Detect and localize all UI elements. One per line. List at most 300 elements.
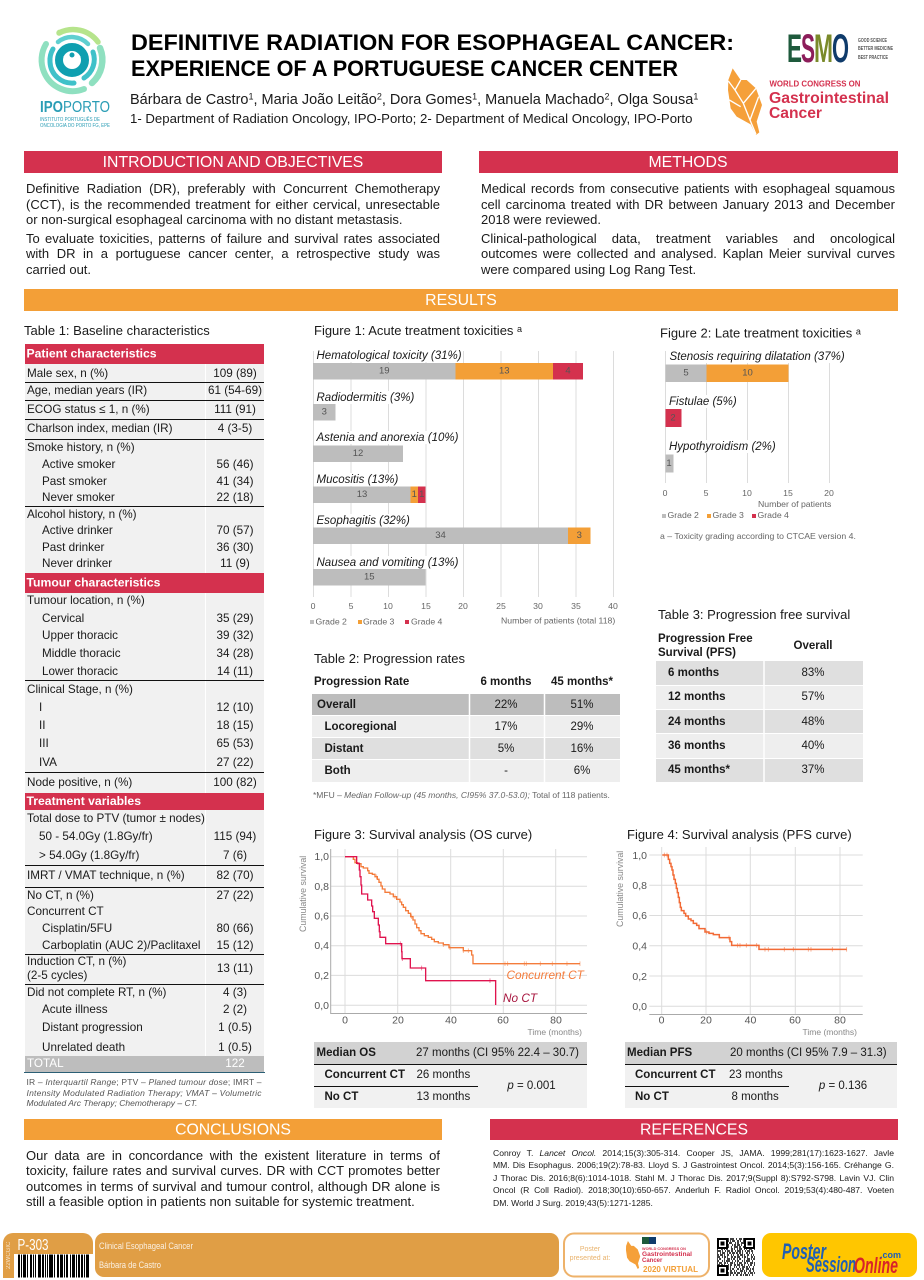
figure 1 title: a <box>517 324 522 334</box>
table 3: progression free survival: Overall <box>794 640 832 652</box>
footer: PosterSessionOnline logo: .com <box>880 1250 901 1260</box>
figure 3: OS Kaplan-Meier chart: 0 <box>342 1014 348 1026</box>
logo: Gastrointestinal Cancer: Gastrointestinal <box>769 90 889 107</box>
bar: hypothyroidism <box>666 440 777 472</box>
table 1: baseline characteristics: Total dose to PTV (tumor ± nodes) <box>27 812 205 825</box>
table 1: baseline characteristics: Age, median years (IR) <box>27 384 147 397</box>
bar: astenia and anorexia <box>313 431 459 462</box>
figure 4: PFS Kaplan-Meier chart: 80 <box>834 1014 846 1026</box>
logo: ESMO: BEST PRACTICE <box>858 55 888 61</box>
title <box>131 30 734 81</box>
heading: conclusions <box>24 1119 442 1140</box>
table 2: progression rates: 6 months <box>480 676 532 688</box>
table 2: progression rates: 5% <box>498 743 514 755</box>
footer: PosterSessionOnline logo: Session <box>806 1252 856 1277</box>
table 3: progression free survival: 36 months <box>668 740 726 752</box>
authors: , Maria João Leitão <box>254 92 377 108</box>
legend: Grade 2 <box>668 510 699 520</box>
authors: 1 <box>693 92 698 102</box>
axis labels: 15 <box>783 488 793 498</box>
legend: Grade 3 <box>363 616 395 626</box>
table 2: progression rates: Overall <box>317 699 356 711</box>
bar: radiodermitis <box>313 391 416 420</box>
table 2: progression rates: Progression Rate <box>314 676 409 688</box>
table: median PFS: 23 months <box>729 1069 783 1081</box>
axis labels: 25 <box>496 601 506 611</box>
table 3: progression free survival: 37% <box>801 764 825 776</box>
figure 3: OS Kaplan-Meier chart: 40 <box>445 1014 457 1026</box>
text: introduction paragraph: Definitive Radiation (DR), preferably with Concurrent Chemotherapy <box>26 181 440 196</box>
table 1: baseline characteristics: III <box>39 737 49 750</box>
text: references list: Conroy T. Lancet Oncol. 2014;15(3):305-314. Cooper JS, JAMA. 1999;281(17):1623-1627. Javle <box>493 1148 894 1158</box>
table 3: progression free survival: 6 months <box>668 667 719 679</box>
table 2: progression rates: Both <box>324 765 351 777</box>
table 1: baseline characteristics: 111 (91) <box>214 403 256 416</box>
figure 2 title: Figure 2: Late treatment toxicities <box>660 326 852 340</box>
table 1: baseline characteristics: 4 (3) <box>223 986 247 999</box>
table 1 footnote: IR – Interquartil Range; PTV – Planed tumour dose; IMRT – <box>26 1077 262 1087</box>
figure 4: PFS Kaplan-Meier chart: Time (months) <box>803 1027 857 1037</box>
curve: concurrent CT <box>345 857 580 966</box>
footer: session and presenter bar: Bárbara de Castro <box>99 1260 161 1271</box>
table 1: baseline characteristics: 109 (89) <box>213 367 257 380</box>
table 1: baseline characteristics: 41 (34) <box>216 475 254 488</box>
table 2 footnote: *MFU – Median Follow-up (45 months, CI95% 37.0-53.0); Total of 118 patients. <box>313 790 610 800</box>
table 1: baseline characteristics: No CT, n (%) <box>27 889 94 902</box>
curve: no CT <box>345 857 496 1005</box>
table 1: baseline characteristics: 1 (0.5) <box>218 1041 252 1054</box>
figure 3: OS Kaplan-Meier chart: 0,0 <box>314 1000 329 1012</box>
logo: IPO Porto: INSTITUTO PORTUGUÊS DE <box>40 115 100 123</box>
table 2: progression rates: - <box>504 765 508 777</box>
table: median PFS: 8 months <box>732 1091 779 1103</box>
axis labels <box>311 601 618 611</box>
table 1: baseline characteristics: 2 (2) <box>223 1003 247 1016</box>
figure 3: OS Kaplan-Meier chart: 0,2 <box>314 970 329 982</box>
bar: stenosis: Stenosis requiring dilatation (37%) <box>670 351 845 363</box>
table: median OS: Median OS <box>316 1047 376 1059</box>
figure 4: PFS Kaplan-Meier chart: 0,2 <box>632 971 647 983</box>
authors: , Dora Gomes <box>382 92 472 108</box>
heading: methods <box>479 151 898 173</box>
figure 4: PFS Kaplan-Meier chart: 0,6 <box>632 910 647 922</box>
table 1: baseline characteristics: 65 (53) <box>216 737 254 750</box>
axis labels: 35 <box>571 601 581 611</box>
table 1: baseline characteristics: Alcohol history, n (%) <box>27 508 137 521</box>
figure 3: OS Kaplan-Meier chart: 0,4 <box>314 940 329 952</box>
label: no CT: No CT <box>503 991 538 1005</box>
text: introduction paragraph <box>26 181 440 276</box>
figure 3: OS Kaplan-Meier chart <box>298 849 587 1037</box>
authors: 2 <box>604 92 609 102</box>
bar: stenosis: 10 <box>742 368 753 378</box>
figure 4: PFS Kaplan-Meier chart <box>615 847 863 1037</box>
table 1: baseline characteristics: Treatment variables <box>26 794 141 808</box>
table 1: baseline characteristics: 1 (0.5) <box>218 1021 252 1034</box>
text: references list: Oncol (R Coll Radiol). 2018;30(10):650-657. Anderluh F. Radiol Oncol. 2019;53(4):480-487. Voeten <box>493 1185 894 1195</box>
table 3: progression free survival: 83% <box>801 667 825 679</box>
bar: hematological toxicity: 19 <box>379 366 390 376</box>
table 1: baseline characteristics: ECOG status ≤ 1, n (%) <box>27 403 150 416</box>
bar: hypothyroidism: 1 <box>666 458 672 469</box>
text: references list: DM. World J Surg. 2019;43(5):1271-1285. <box>493 1198 653 1208</box>
logo: ESMO: M <box>814 27 833 71</box>
figure 3: OS Kaplan-Meier chart: 0,8 <box>314 881 329 893</box>
table: median PFS: Concurrent CT <box>635 1069 716 1081</box>
authors: 2 <box>377 92 382 102</box>
figure 4: PFS Kaplan-Meier chart: 0,0 <box>632 1001 647 1013</box>
table 1: baseline characteristics: 100 (82) <box>213 776 257 789</box>
bar: radiodermitis: Radiodermitis (3%) <box>316 392 414 404</box>
figure 4: PFS Kaplan-Meier chart: 0,4 <box>632 940 647 952</box>
table 3: progression free survival: Progression Free <box>658 633 753 645</box>
table 1: baseline characteristics: Past drinker <box>42 541 104 554</box>
table 2: progression rates: 16% <box>570 743 594 755</box>
figure 4: PFS Kaplan-Meier chart: 60 <box>789 1014 801 1026</box>
table 1: baseline characteristics: 82 (70) <box>216 869 254 882</box>
text: conclusions paragraph <box>26 1148 440 1209</box>
axis labels <box>663 488 834 498</box>
figure 2 footnote: a – Toxicity grading according to CTCAE version 4. <box>660 531 856 541</box>
table 2: progression rates: Distant <box>324 743 364 755</box>
text: conclusions paragraph: Our data are in concordance with the existent literature in terms of <box>26 1148 440 1162</box>
table 3: progression free survival <box>656 633 863 782</box>
bar: fistulae: Fistulae (5%) <box>669 396 737 408</box>
table 3: progression free survival: 24 months <box>668 716 726 728</box>
table 1: baseline characteristics: Active smoker <box>42 458 115 471</box>
heading: introduction and objectives: INTRODUCTION AND OBJECTIVES <box>103 154 363 171</box>
text: introduction paragraph: or non-surgical esophageal carcinoma with no distant metastasis. <box>26 212 402 227</box>
logo: Gastrointestinal Cancer <box>728 68 889 135</box>
axis title: Number of patients (total 118) <box>501 616 615 626</box>
text: references list <box>493 1148 894 1208</box>
axis labels: 15 <box>421 601 431 611</box>
table 1: baseline characteristics: 35 (29) <box>216 612 254 625</box>
heading: results: RESULTS <box>425 292 497 309</box>
text: methods paragraph: 2018 were reviewed. <box>481 212 601 227</box>
heading: references <box>490 1119 898 1140</box>
table 2: progression rates <box>312 676 620 782</box>
table 2: progression rates: 6% <box>574 765 590 777</box>
table 1: baseline characteristics: I <box>39 701 42 714</box>
footer: PosterSessionOnline logo: Poster <box>782 1239 827 1264</box>
table 1: baseline characteristics: 27 (22) <box>216 889 254 902</box>
bar: hematological toxicity: 4 <box>565 366 571 376</box>
logo: Gastrointestinal Cancer: WORLD CONGRESS ON <box>770 78 860 88</box>
axis title: Number of patients <box>758 499 832 509</box>
logo: ESMO: O <box>832 27 849 71</box>
authors: , Olga Sousa <box>609 92 694 108</box>
legend: Grade 3 <box>712 510 744 520</box>
text: methods paragraph: Medical records from consecutive patients with esophageal squamous <box>481 181 895 196</box>
table 1: baseline characteristics: 22 (18) <box>216 491 254 504</box>
figure 3: OS Kaplan-Meier chart: 0,6 <box>314 910 329 922</box>
figure 4: PFS Kaplan-Meier chart: 0,8 <box>632 880 647 892</box>
axis labels: 5 <box>704 488 709 498</box>
bar: radiodermitis: 3 <box>322 406 327 418</box>
table 1: baseline characteristics: Distant progression <box>42 1021 143 1034</box>
figure 3: OS Kaplan-Meier chart: Cumulative survival <box>298 856 308 932</box>
table: median PFS: p = 0.136 <box>818 1080 867 1092</box>
table 1: baseline characteristics: Unrelated death <box>42 1041 125 1054</box>
table 1 footnote <box>26 1077 262 1108</box>
table 1: baseline characteristics: Node positive, n (%) <box>27 776 132 789</box>
table 3: progression free survival: 40% <box>801 740 825 752</box>
figure 3: OS Kaplan-Meier chart: 80 <box>550 1014 562 1026</box>
text: methods paragraph: Clinical-pathological data, treatment variables and oncological <box>481 230 895 246</box>
heading: methods: METHODS <box>648 154 728 171</box>
table 1: baseline characteristics: Acute illness <box>42 1003 108 1016</box>
table 1: baseline characteristics: 61 (54-69) <box>208 384 262 397</box>
bar: nausea and vomiting <box>313 556 459 586</box>
table 3: progression free survival: 48% <box>801 716 825 728</box>
table 1: baseline characteristics: 36 (30) <box>216 541 254 554</box>
table 3: progression free survival: Survival (PFS) <box>658 647 736 659</box>
heading: introduction and objectives <box>24 151 442 173</box>
table: median OS: 13 months <box>416 1091 470 1103</box>
bar: esophagitis <box>313 514 590 544</box>
axis labels: 40 <box>608 601 618 611</box>
figure 3: OS Kaplan-Meier chart: 60 <box>497 1014 509 1026</box>
bar: mucositis <box>313 473 426 503</box>
table: median OS: Concurrent CT <box>324 1069 405 1081</box>
table 1: baseline characteristics: 14 (11) <box>217 665 253 678</box>
text: methods paragraph: were compared using Log Rang Test. <box>481 262 696 276</box>
bar: esophagitis: 3 <box>577 530 582 541</box>
title: EXPERIENCE OF A PORTUGUESE CANCER CENTER <box>131 56 678 81</box>
bar: esophagitis: 34 <box>435 530 446 541</box>
table 1: baseline characteristics: 115 (94) <box>214 830 256 843</box>
table 1: baseline characteristics: Never smoker <box>42 491 115 504</box>
figure 4: PFS Kaplan-Meier chart: 40 <box>745 1014 756 1026</box>
logo: ESMO: GOOD SCIENCE <box>858 38 887 44</box>
table 1: baseline characteristics: Did not complete RT, n (%) <box>27 986 167 999</box>
table 1: baseline characteristics: (2-5 cycles) <box>27 969 88 982</box>
axis labels: 5 <box>349 601 354 611</box>
table 1: baseline characteristics: Active drinker <box>42 524 113 537</box>
logo: IPO Porto: ONCOLOGIA DO PORTO FG, EPE <box>40 123 110 129</box>
figure 3: OS Kaplan-Meier chart: Time (months) <box>528 1027 582 1037</box>
table 1: baseline characteristics <box>24 344 265 1072</box>
bar: astenia and anorexia: 12 <box>353 448 363 459</box>
logo: ESMO: BETTER MEDICINE <box>858 46 894 52</box>
table 1: baseline characteristics: 70 (57) <box>216 524 254 537</box>
bar: nausea and vomiting: 15 <box>364 572 375 582</box>
bar: fistulae <box>666 395 737 427</box>
table 1: baseline characteristics: Never drinker <box>42 557 112 570</box>
table: median OS: 27 months (CI 95% 22.4 – 30.7) <box>416 1047 579 1059</box>
table 1: baseline characteristics: Concurrent CT <box>27 905 104 918</box>
text: introduction paragraph: with DR in a portuguese cancer center, a retrospective study was <box>26 246 440 261</box>
table 2: progression rates: Locoregional <box>324 721 397 733</box>
footer: poster id and barcode <box>3 1233 93 1280</box>
logo: ESMO: S <box>801 27 815 71</box>
heading: results <box>24 289 898 311</box>
table 1: baseline characteristics: 122 <box>225 1057 245 1070</box>
table 1: baseline characteristics: 34 (28) <box>216 647 254 660</box>
curve: PFS <box>662 853 847 952</box>
logo: ESMO <box>787 27 894 71</box>
label: concurrent CT: Concurrent CT <box>506 968 585 982</box>
table 3: progression free survival: 12 months <box>668 691 726 703</box>
footer: poster presented at badge: 2020 VIRTUAL <box>643 1264 698 1274</box>
authors: , Manuela Machado <box>477 92 604 108</box>
table 1: baseline characteristics: 80 (66) <box>216 922 254 935</box>
text: introduction paragraph: To evaluate toxicities, patterns of failure and survival rates associated <box>26 230 440 246</box>
table 1 footnote: Modulated Arc Therapy; Chemotherapy – CT. <box>26 1098 197 1108</box>
footer: PosterSessionOnline logo: Online <box>854 1253 898 1278</box>
table 1: baseline characteristics: Tumour location, n (%) <box>27 594 145 607</box>
table 2: progression rates: 51% <box>570 699 594 711</box>
footer: session and presenter bar <box>95 1233 559 1277</box>
bar: mucositis: 1 <box>419 489 424 500</box>
figure 4: PFS Kaplan-Meier chart: 20 <box>700 1014 712 1026</box>
footer: QR code <box>717 1238 755 1276</box>
text: references list: J Thorac Dis. 2016;8(6):1014-1018. Stahl M. J Thorac Dis. 2017;9(Suppl 8):S792-S798. Lavin VJ. Clin <box>493 1173 894 1183</box>
legend: Grade 2 <box>316 616 347 626</box>
affiliations: 1- Department of Radiation Oncology, IPO-Porto; 2- Department of Medical Oncology, IPO-Porto <box>130 111 692 126</box>
table 3: progression free survival: 45 months* <box>668 764 731 776</box>
table 2: progression rates: 45 months* <box>551 676 614 688</box>
axis labels: 0 <box>311 601 316 611</box>
table 3 title: Table 3: Progression free survival <box>658 607 850 622</box>
table 1: baseline characteristics: II <box>39 719 46 732</box>
text: conclusions paragraph: outcomes in terms of survival and tumour control, although DR alone is <box>26 1178 440 1194</box>
footer: poster id and barcode: 22WCGIC <box>6 1241 12 1269</box>
logo: IPO Porto: IPOPORTO <box>40 99 110 116</box>
table 1 title: Table 1: Baseline characteristics <box>24 323 210 338</box>
text: conclusions paragraph: toxicity, failure rates and survival curves. DR with CCT promotes better <box>26 1163 440 1178</box>
bar: hematological toxicity: Hematological toxicity (31%) <box>316 350 462 362</box>
text: introduction paragraph: (CCT), is the recommended treatment for either cervical, unresectable <box>26 196 440 212</box>
footer: PosterSessionOnline logo <box>762 1233 917 1278</box>
table 1: baseline characteristics: Charlson index, median (IR) <box>27 422 173 435</box>
table: median OS: p = 0.001 <box>506 1080 556 1092</box>
heading: conclusions: CONCLUSIONS <box>175 1122 291 1138</box>
table 1: baseline characteristics: Cervical <box>42 612 84 625</box>
table 2: progression rates: 22% <box>494 699 518 711</box>
table 1: baseline characteristics: Patient characteristics <box>26 346 157 360</box>
footer: session and presenter bar: Clinical Esophageal Cancer <box>99 1241 193 1252</box>
table 1: baseline characteristics: Upper thoracic <box>42 629 118 642</box>
table 1: baseline characteristics: Tumour characteristics <box>26 576 161 590</box>
table 1: baseline characteristics: 12 (10) <box>216 701 254 714</box>
figure 1 title: Figure 1: Acute treatment toxicities <box>314 323 513 338</box>
logo: ESMO: E <box>787 27 802 71</box>
table: median OS: 26 months <box>416 1069 470 1081</box>
bar: hypothyroidism: Hypothyroidism (2%) <box>669 441 776 453</box>
logo: Gastrointestinal Cancer: Cancer <box>769 105 822 122</box>
figure 3: OS Kaplan-Meier chart: 1,0 <box>314 851 329 863</box>
text: conclusions paragraph: still a feasible option in patients non suitable for systemic treatment. <box>26 1194 415 1209</box>
logo: IPO Porto <box>40 30 110 129</box>
legend <box>310 616 443 626</box>
authors: 1 <box>248 92 254 102</box>
table 1: baseline characteristics: Induction CT, n (%) <box>27 955 126 968</box>
authors: Bárbara de Castro <box>130 92 248 108</box>
table 2: progression rates: 29% <box>570 721 594 733</box>
table: median PFS: No CT <box>635 1091 669 1103</box>
figure 1: acute toxicities bar chart <box>310 349 618 626</box>
footer: poster presented at badge: WORLD CONGRESS ON <box>642 1247 686 1251</box>
footer: poster id and barcode: P-303 <box>18 1237 48 1254</box>
table 1: baseline characteristics: 13 (11) <box>217 962 253 975</box>
table 1: baseline characteristics: 50 - 54.0Gy (1.8Gy/fr) <box>39 830 153 843</box>
bar: mucositis: Mucositis (13%) <box>316 474 398 486</box>
table 2: progression rates: 17% <box>494 721 518 733</box>
bar: astenia and anorexia: Astenia and anorexia (10%) <box>316 432 459 444</box>
figure 4: PFS Kaplan-Meier chart: Cumulative survival <box>615 851 625 927</box>
table: median OS <box>314 1042 587 1108</box>
bar: mucositis: 13 <box>357 489 367 500</box>
authors: 1 <box>472 92 477 102</box>
table 1: baseline characteristics: IMRT / VMAT technique, n (%) <box>27 869 185 882</box>
legend: Grade 4 <box>411 616 443 626</box>
title: DEFINITIVE RADIATION FOR ESOPHAGEAL CANCER: <box>131 30 734 55</box>
text: methods paragraph <box>481 181 895 276</box>
axis labels: 30 <box>533 601 543 611</box>
figure 2 title: a <box>856 326 861 336</box>
table 1: baseline characteristics: 39 (32) <box>216 629 254 642</box>
text: introduction paragraph: carried out. <box>26 262 91 276</box>
legend <box>662 510 789 520</box>
table 2 title: Table 2: Progression rates <box>314 651 466 666</box>
footer: poster presented at badge: Poster <box>580 1246 601 1253</box>
table 1: baseline characteristics: Cisplatin/5FU <box>42 922 112 935</box>
table 3: progression free survival: 57% <box>801 691 825 703</box>
table 1: baseline characteristics: Smoke history, n (%) <box>27 441 135 454</box>
table 1: baseline characteristics: 18 (15) <box>216 719 254 732</box>
table: median OS: No CT <box>324 1091 358 1103</box>
table 1: baseline characteristics: IVA <box>39 756 57 769</box>
table 1: baseline characteristics: 27 (22) <box>216 756 254 769</box>
axis labels: 10 <box>383 601 393 611</box>
table: median PFS <box>625 1042 897 1108</box>
text: methods paragraph: outcomes were collected and analysed. Kaplan Meier survival curves <box>481 246 895 261</box>
bar: hematological toxicity <box>313 349 583 380</box>
axis labels: 20 <box>458 601 468 611</box>
figure 3 title: Figure 3: Survival analysis (OS curve) <box>314 827 532 842</box>
bar: nausea and vomiting: Nausea and vomiting (13%) <box>316 557 459 569</box>
table 1: baseline characteristics: Clinical Stage, n (%) <box>27 683 133 696</box>
table 1: baseline characteristics: Past smoker <box>42 475 107 488</box>
barcode <box>18 1254 90 1278</box>
axis labels: 20 <box>824 488 834 498</box>
bar: fistulae: 2 <box>670 412 676 424</box>
table 1: baseline characteristics: 7 (6) <box>223 849 247 862</box>
table 1: baseline characteristics: Lower thoracic <box>42 665 118 678</box>
figure 3: OS Kaplan-Meier chart: 20 <box>392 1014 404 1026</box>
figure 2: late toxicities bar chart <box>662 350 846 520</box>
bar: hematological toxicity: 13 <box>499 366 510 376</box>
footer: poster presented at badge: presented at: <box>570 1255 610 1262</box>
table 1: baseline characteristics: 11 (9) <box>220 557 250 570</box>
heading: references: REFERENCES <box>640 1122 748 1138</box>
table 1: baseline characteristics: Middle thoracic <box>42 647 121 660</box>
footer: poster presented at badge <box>564 1234 709 1276</box>
table 1: baseline characteristics: TOTAL <box>27 1057 64 1070</box>
table: median PFS: 20 months (CI 95% 7.9 – 31.3) <box>730 1047 887 1059</box>
table 1: baseline characteristics: 4 (3-5) <box>218 422 252 435</box>
text: methods paragraph: cell carcinoma treated with DR between January 2013 and December <box>481 196 895 212</box>
table 1: baseline characteristics: 15 (12) <box>216 939 254 952</box>
axis labels: 0 <box>663 488 668 498</box>
table 1 footnote: Intensity Modulated Radiation Therapy; VMAT – Volumetric <box>26 1088 262 1098</box>
footer: poster presented at badge: Cancer <box>642 1258 663 1264</box>
table 1: baseline characteristics: > 54.0Gy (1.8Gy/fr) <box>39 849 139 862</box>
figure 4: PFS Kaplan-Meier chart: 1,0 <box>632 850 647 862</box>
table 1: baseline characteristics: Carboplatin (AUC 2)/Paclitaxel <box>42 939 200 952</box>
